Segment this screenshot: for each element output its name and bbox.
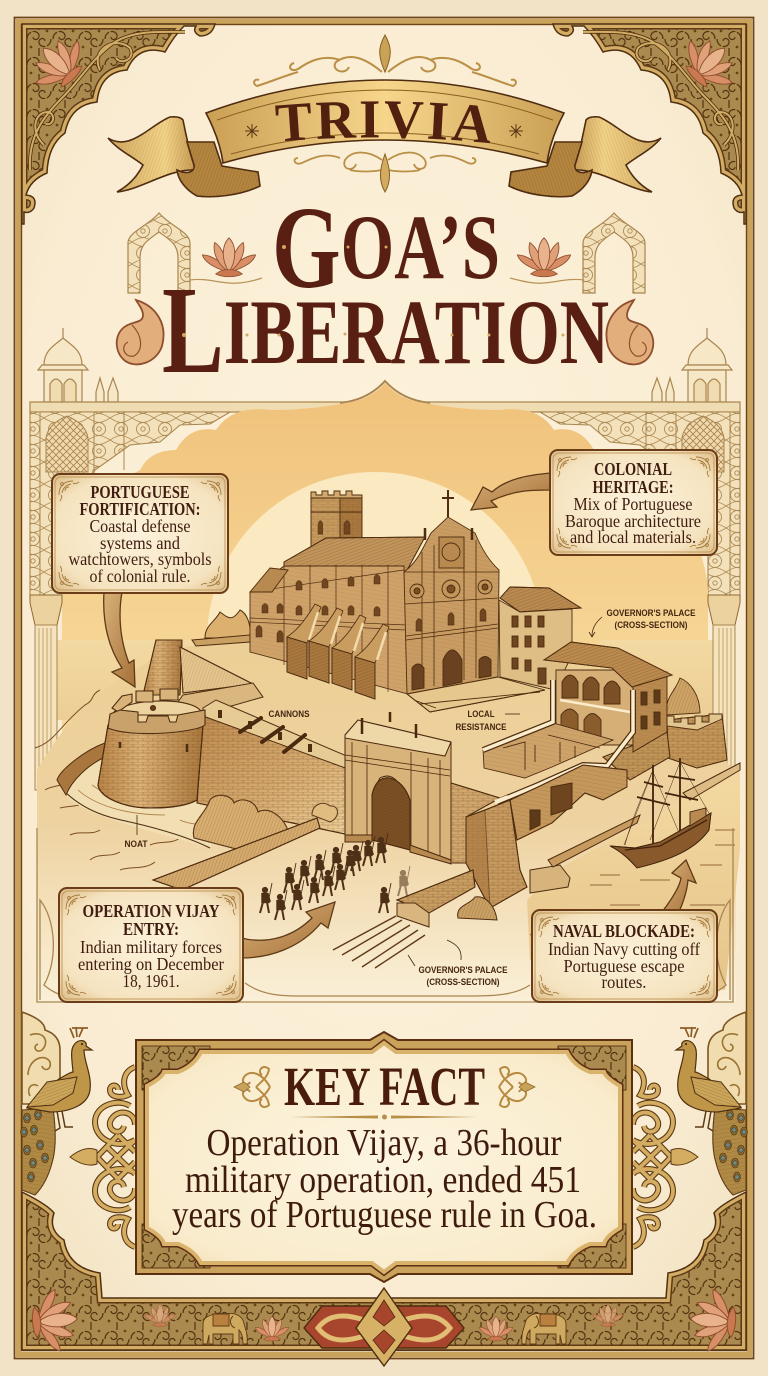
banner folds (177, 142, 260, 197)
callout: portuguese fortification: of colonial rule. (90, 566, 190, 586)
lower banner flourish (295, 152, 475, 192)
key fact panel (136, 1032, 632, 1282)
callout: operation vijay entry (59, 888, 243, 1002)
panel body text: military operation, ended 451 (185, 1159, 581, 1201)
elephant: left (203, 1313, 247, 1344)
lotus: right (510, 238, 584, 283)
corner ornament: top left (22, 24, 215, 224)
callout: portuguese fortification: systems and (100, 533, 180, 553)
peacock: right (676, 1012, 747, 1195)
small label: moat: NOAT (124, 839, 148, 850)
title (162, 182, 609, 400)
tower parapet (108, 710, 205, 734)
soldiers (260, 833, 410, 920)
banner: trivia ribbon (108, 80, 661, 197)
title: L (162, 262, 224, 400)
banner main (206, 80, 564, 163)
small label: local resistance (456, 709, 520, 733)
panel frame (136, 1032, 632, 1282)
scene frame architecture (30, 328, 740, 600)
callout: colonial heritage: Baroque architecture (565, 511, 701, 531)
callout: operation vijay entry: ENTRY: (123, 919, 179, 939)
moat (57, 743, 235, 848)
callout: portuguese fortification (52, 474, 228, 593)
callout: portuguese fortification: watchtowers, symbols (68, 549, 212, 569)
lotus: lower left corner (30, 1288, 80, 1353)
knot ornament: left (70, 1067, 135, 1247)
centre knot (304, 1288, 464, 1366)
church roof (284, 537, 425, 585)
right bastion (667, 714, 727, 768)
paisley: left (117, 300, 164, 364)
elephant: right (522, 1313, 566, 1344)
callout: naval blockade: routes. (602, 972, 646, 992)
pilaster lines (40, 412, 730, 600)
ship (610, 758, 711, 868)
church steps (407, 677, 545, 712)
panel divider (290, 1114, 477, 1120)
arrow: fortification (104, 592, 135, 687)
title: G (272, 182, 341, 313)
decorative arch: right (583, 213, 645, 293)
sea (56, 640, 714, 790)
trees behind bastion (205, 610, 252, 638)
far bastion (143, 610, 263, 713)
callout: operation vijay entry: 18, 1961. (122, 971, 180, 991)
sun (207, 472, 543, 808)
title: OA’S (341, 196, 500, 298)
panel heading flourish: left (234, 1067, 270, 1107)
trees (193, 795, 338, 850)
tower back merlons (112, 689, 178, 712)
church facade (404, 490, 499, 694)
callout: naval blockade: NAVAL BLOCKADE: (553, 921, 695, 941)
peacock: left (21, 1012, 92, 1195)
palace arcades (556, 670, 633, 745)
stair wall (397, 870, 497, 927)
decorative arch: left (128, 213, 190, 293)
quay (548, 763, 740, 867)
callout: portuguese fortification: FORTIFICATION: (80, 499, 200, 519)
panel inner field (147, 1043, 620, 1272)
callout: portuguese fortification: Coastal defense (90, 516, 191, 536)
callout: portuguese fortification: PORTUGUESE (90, 482, 190, 502)
small label: local resistance: RESISTANCE (456, 722, 506, 733)
callout: colonial heritage: and local materials. (570, 527, 696, 547)
palace roof (544, 642, 672, 687)
banner stars (245, 124, 523, 138)
banner right tail (573, 117, 661, 192)
banner word: TRIVIA (275, 101, 490, 144)
small label: governor's palace lower (408, 940, 508, 988)
callout: naval blockade: Indian Navy cutting off (548, 939, 700, 959)
lotus: left (190, 238, 262, 283)
arrow: colonial heritage (471, 473, 552, 510)
callout: colonial heritage: HERITAGE: (592, 477, 674, 497)
column: left (30, 595, 62, 790)
small label: cannons: CANNONS (268, 709, 310, 720)
corner ornament: top right (553, 24, 746, 224)
callout: operation vijay entry: Indian military forces (80, 937, 222, 957)
small label: local resistance: LOCAL (468, 709, 495, 720)
annex building (499, 587, 581, 690)
column: right (708, 595, 740, 790)
foreground bush (458, 897, 497, 920)
round bastion tower (98, 689, 205, 808)
panel body text (172, 1122, 597, 1236)
arrow: operation vijay (241, 902, 335, 958)
central peak (340, 381, 430, 403)
tower terrace (112, 701, 205, 715)
small lotuses in band (145, 1304, 623, 1341)
palace tree (666, 678, 700, 715)
dome: right (652, 328, 732, 402)
small label: moat (124, 815, 148, 850)
callout: naval blockade (532, 910, 717, 1002)
waves (530, 830, 735, 935)
lower frame lines (37, 828, 733, 1002)
right wall, ruin and bastion (451, 765, 627, 908)
shore marks (35, 690, 180, 870)
church tower (311, 491, 362, 552)
dome: left (38, 328, 118, 402)
triumphal gate (345, 712, 451, 864)
jali screen: left (46, 416, 88, 472)
arrow: naval blockade (662, 860, 696, 912)
palace tower block (633, 672, 667, 752)
small label: governor's palace upper: GOVERNOR'S PALACE (606, 608, 696, 619)
cannons (240, 718, 305, 752)
jali screen: right (682, 416, 724, 472)
entablature (30, 402, 740, 412)
small label: governor's palace lower: GOVERNOR'S PALACE (418, 965, 508, 976)
panel heading flourish: right (499, 1067, 535, 1107)
small label: governor's palace upper (589, 608, 696, 637)
lotus: lower right corner (688, 1288, 738, 1353)
callout: colonial heritage: COLONIAL (594, 459, 672, 479)
top flourish (254, 35, 516, 86)
ornamental spandrel (30, 384, 740, 600)
callout: operation vijay entry: OPERATION VIJAY (82, 901, 220, 921)
harbour water (527, 765, 740, 990)
panel corner filigree (142, 1046, 626, 1268)
panel body text: years of Portuguese rule in Goa. (172, 1194, 597, 1236)
banner left tail (108, 117, 196, 192)
small label: governor's palace upper: (CROSS-SECTION) (614, 620, 688, 631)
cross-section cut outlines (483, 680, 633, 802)
sky (62, 383, 708, 860)
steps (333, 916, 425, 968)
knot ornament: right (633, 1067, 698, 1247)
callout: colonial heritage: Mix of Portuguese (574, 494, 693, 514)
paisley: right (606, 300, 653, 364)
palace cross-section floor (483, 723, 613, 778)
panel heading: KEY FACT (284, 1056, 485, 1117)
callout: operation vijay entry: entering on December (78, 954, 224, 974)
church nave wall (250, 565, 408, 694)
church buttresses (287, 604, 389, 699)
panel body text: Operation Vijay, a 36-hour (206, 1122, 562, 1164)
callout: colonial heritage (550, 450, 717, 555)
callout: naval blockade: Portuguese escape (564, 956, 685, 976)
road wall (153, 818, 320, 890)
palace base wall (603, 732, 670, 780)
lower border band (22, 1192, 746, 1350)
fortress wall (197, 700, 356, 834)
small label: governor's palace lower: (CROSS-SECTION) (426, 977, 500, 988)
governor's palace (483, 642, 727, 802)
church (250, 490, 581, 712)
title: IBERATION (224, 281, 609, 383)
ground (37, 640, 736, 1002)
